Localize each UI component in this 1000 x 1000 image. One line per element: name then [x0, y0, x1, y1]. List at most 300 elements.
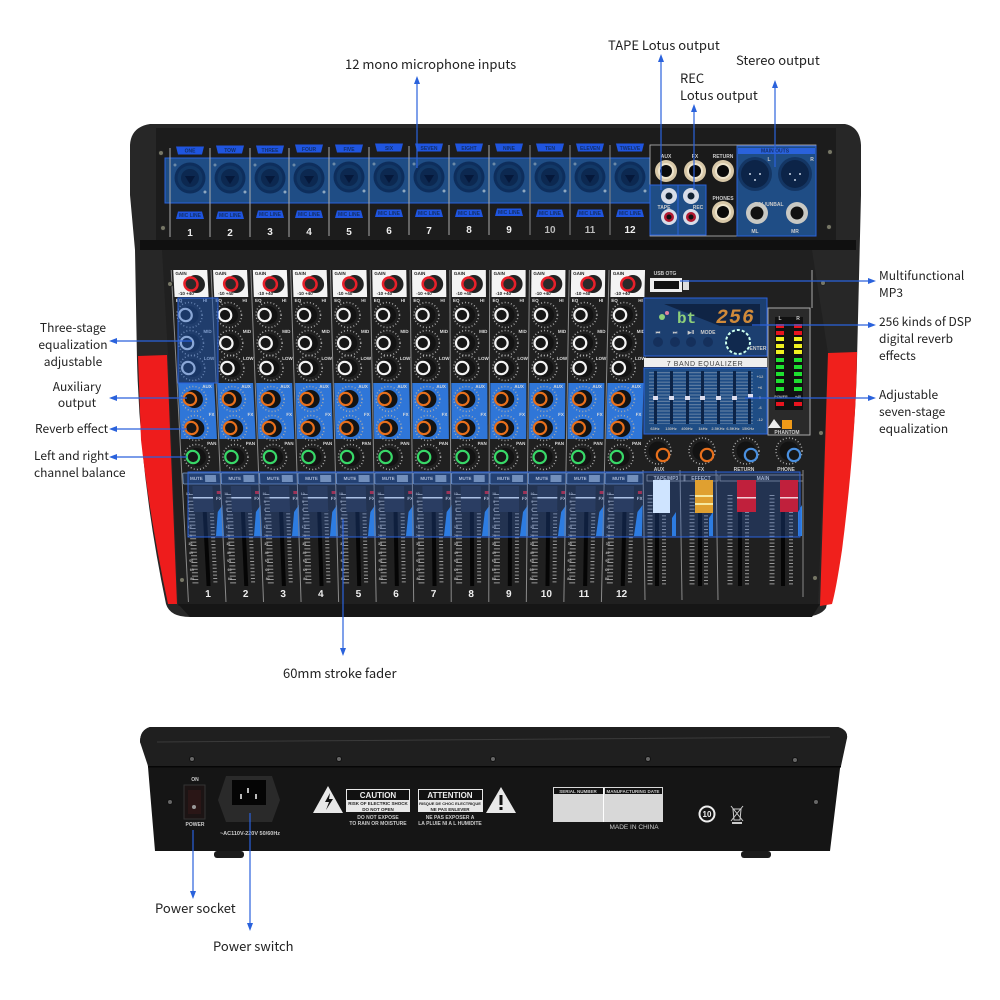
channel strip 4: 4: [318, 589, 324, 600]
rear top band: [140, 727, 847, 766]
input channel 6: [369, 144, 406, 237]
arrow: channel balance: [109, 454, 187, 460]
channel strip 6: FX: [407, 496, 413, 501]
DSP display panel: bt: [677, 310, 696, 328]
input channel 12: [610, 144, 646, 236]
power switch: POWER: [186, 822, 205, 828]
channel strip 3: [251, 270, 303, 602]
channel strip 12: 12: [616, 589, 628, 600]
label: auxiliary output: output: [58, 394, 97, 411]
channel strip 1: PAN: [207, 441, 217, 446]
channel strip 4: MID: [321, 329, 331, 334]
channel strip 12: EQ: [611, 298, 618, 303]
channel strip 3: LOW: [282, 356, 294, 361]
input channel 2: 2: [227, 228, 233, 239]
channel strip 6: 50: [378, 559, 382, 563]
channel strip 12: LOW: [635, 356, 646, 361]
channel strip 6: 0: [378, 508, 381, 512]
EQ title band: [644, 358, 767, 368]
icon: 10 year mark: [700, 806, 714, 822]
seven band equalizer: -12: [757, 417, 764, 422]
channel strip 8: 5: [455, 500, 457, 504]
input channel 6: 6: [386, 226, 392, 237]
channel strip 6: HI: [401, 298, 405, 303]
seven band equalizer: +12: [757, 374, 764, 379]
channel strip 6: -10 +40: [377, 291, 393, 296]
channel strip 2: 10: [224, 492, 228, 496]
channel strip 6: 10: [378, 525, 382, 529]
output jack panel: RETURN: [713, 154, 734, 160]
input channel 3: [250, 146, 286, 238]
channel strip 7: FX: [442, 412, 447, 417]
arrow: DSP: [752, 322, 876, 328]
channel strip 4: AUX: [319, 384, 329, 389]
channel strip 5: 5: [355, 589, 362, 600]
channel strip 5: MID: [361, 329, 370, 334]
channel strip 9: PAN: [516, 441, 525, 446]
arrow: power switch: [247, 813, 253, 931]
channel strip 1: [171, 270, 228, 602]
input highlight band: [165, 158, 650, 203]
channel strip 10: AUX: [553, 384, 563, 389]
channel strip 4: HI: [322, 298, 326, 303]
master knobs: AUX: [654, 467, 665, 473]
channel strip 2: 50: [227, 559, 231, 563]
channel strip 11: -10 +40: [575, 291, 591, 296]
bezel shadow: [140, 240, 856, 250]
channel strip 8: PAN: [478, 441, 487, 446]
output jack panel: PHONES: [712, 196, 734, 202]
channel strip 1: MID: [203, 329, 213, 334]
channel strip 4: GAIN: [295, 271, 306, 276]
channel strip 11: EQ: [572, 298, 579, 303]
level meter: PHANTOM: [774, 430, 800, 436]
power socket: ~AC110V-220V 50/60Hz: [220, 831, 280, 837]
channel strip 8: 60: [454, 568, 458, 572]
channel strip 8: 10: [454, 492, 458, 496]
channel strip 9: -10 +40: [496, 291, 511, 296]
input channel 11: 11: [585, 225, 596, 236]
channel strip 11: 80: [567, 577, 571, 581]
channel strip 8: [450, 270, 490, 602]
DSP display panel: ⏮: [656, 330, 661, 336]
master faders: [643, 470, 803, 600]
channel strip 1: 10: [186, 492, 190, 496]
channel strip 6: 30: [378, 542, 382, 546]
channel strip 1: FX: [216, 496, 222, 501]
channel strip 1: 0: [188, 508, 190, 512]
input channel 8: EIGHT: [461, 146, 477, 152]
channel strip 1: 5: [187, 500, 189, 504]
channel strip 5: HI: [361, 298, 366, 303]
channel strip 11: GAIN: [573, 271, 584, 276]
channel strip 10: 5: [531, 517, 533, 521]
channel strip 1: EQ: [176, 298, 183, 303]
channel strip 2: 60: [227, 568, 232, 572]
channel strip 4: 20: [302, 534, 306, 538]
channel strip 8: 0: [455, 508, 457, 512]
master knobs: RETURN: [734, 467, 755, 473]
input channel 10: MIC LINE: [539, 211, 562, 217]
seven band equalizer: 130Hz: [665, 426, 677, 431]
label: multifunctional MP3: MP3: [879, 284, 903, 301]
input channel 6: MIC LINE: [378, 211, 401, 217]
channel strip 10: LOW: [557, 356, 568, 361]
label: 12 mono microphone inputs: 12 mono microphone inputs: [345, 54, 516, 73]
channel strip 11: 30: [568, 542, 572, 546]
output jack panel: BAL/UNBAL: [754, 202, 784, 208]
arrow: MP3: [680, 278, 876, 284]
channel strip 7: AUX: [436, 384, 446, 389]
channel strip 6: GAIN: [374, 271, 386, 276]
output jack panel: MR: [791, 229, 799, 235]
channel strip 8: LOW: [478, 356, 489, 361]
channel strip 3: FX: [292, 496, 298, 501]
rear screws: [168, 756, 818, 804]
channel strip 1: 60: [190, 568, 194, 572]
channel strip 9: [489, 270, 529, 602]
rear body: [140, 727, 847, 851]
channel strip 6: 80: [379, 577, 383, 581]
level meter: L: [778, 316, 782, 322]
channel strip 12: 5: [607, 517, 609, 521]
input channel 12: TWELVE: [620, 146, 641, 152]
serial number plate: [553, 787, 663, 831]
channel strip 6: LOW: [400, 356, 411, 361]
channel strip 8: 10: [454, 525, 458, 529]
output jack panel: REC: [693, 205, 704, 211]
arrow: stereo output: [772, 80, 778, 167]
channel strip 12: FX: [637, 496, 643, 501]
channel strip 10: 30: [530, 542, 534, 546]
input channel 9: [489, 144, 526, 236]
channel strip 6: FX: [403, 412, 409, 417]
channel strip 10: -10 +40: [535, 291, 551, 296]
channel strip 5: 10: [339, 492, 343, 496]
input channel 11: MIC LINE: [579, 211, 602, 217]
channel strip 5: FX: [369, 496, 375, 501]
channel strip 12: HI: [638, 298, 643, 303]
channel strip 10: HI: [559, 298, 564, 303]
label: three-stage equalization: Three-stage: [40, 319, 106, 336]
channel strip 11: 40: [568, 551, 572, 555]
channel strip 9: 80: [492, 577, 496, 581]
channel strip 5: 30: [340, 542, 344, 546]
channel strip 5: 60: [341, 568, 345, 572]
channel strip 5: -10 +40: [337, 291, 353, 296]
output jack panel: ML: [751, 229, 759, 235]
channel strip 7: 0: [417, 508, 419, 512]
output jack panel: L: [767, 157, 771, 163]
input channel 3: 3: [267, 227, 273, 238]
channel strip 5: AUX: [358, 384, 368, 389]
channel strip 9: MID: [518, 329, 527, 334]
rear bevel line: [157, 737, 830, 742]
USB port: USB OTG: [654, 271, 676, 277]
channel strip 7: 20: [416, 534, 420, 538]
input channel 5: FIVE: [343, 147, 355, 153]
label: DSP reverb: digital reverb: [879, 330, 953, 347]
channel strip 11: MUTE: [574, 476, 587, 481]
channel strip 3: 60: [265, 568, 269, 572]
channel strip 4: MUTE: [305, 476, 318, 481]
channel strip 2: GAIN: [215, 271, 227, 276]
channel strip 1: GAIN: [175, 271, 187, 276]
rear seam: [148, 766, 841, 768]
seven band equalizer: +6: [758, 385, 763, 390]
channel strip 3: 10: [264, 525, 268, 529]
channel strip 6: 5: [378, 500, 380, 504]
channel strip 12: 5: [608, 500, 610, 504]
DSP display panel: MODE: [700, 330, 716, 336]
channel strip 9: 9: [506, 589, 512, 600]
attention label: [418, 789, 483, 827]
input channel 10: TEN: [545, 146, 555, 152]
channel strip 12: FX: [636, 412, 642, 417]
red left side panel: [138, 355, 177, 604]
channel strip 12: 10: [607, 492, 611, 496]
label: adjustable equalization: equalization: [879, 420, 948, 437]
arrow: microphone inputs: [414, 76, 420, 168]
arrow: rec lotus: [691, 104, 697, 190]
input channel 1: [170, 146, 206, 239]
output jack panel: FX: [692, 154, 699, 160]
label: DSP reverb: 256 kinds of DSP: [879, 313, 972, 330]
channel strip 11: HI: [599, 298, 603, 303]
channel strip 9: 40: [492, 551, 496, 555]
label: rec lotus output: REC: [680, 68, 704, 87]
label: multifunctional MP3: Multifunctional: [879, 267, 964, 284]
channel strip 7: GAIN: [414, 271, 425, 276]
input channel 3: THREE: [262, 148, 279, 154]
channel strip 8: GAIN: [454, 271, 465, 276]
input channel 12: MIC LINE: [619, 211, 642, 217]
input channel 1: 1: [187, 228, 193, 239]
channel strip 7: 10: [416, 492, 420, 496]
channel strip 3: GAIN: [255, 271, 266, 276]
channel strip 2: MID: [243, 329, 252, 334]
input channel 5: [329, 144, 366, 238]
channel strip 9: AUX: [514, 384, 524, 389]
channel strip 4: EQ: [295, 298, 302, 303]
label: three-stage equalization: equalization: [38, 336, 108, 353]
level meter: +48: [795, 395, 801, 399]
input channel 2: [210, 146, 246, 239]
label: adjustable equalization: Adjustable: [879, 386, 938, 403]
channel strip 3: 50: [265, 559, 269, 563]
channel strip 4: 50: [303, 559, 307, 563]
input channel 9: 9: [506, 225, 512, 236]
channel strip 9: GAIN: [494, 271, 505, 276]
channel strip 7: FX: [446, 496, 451, 501]
input channel 4: 4: [306, 227, 312, 238]
channel strip 5: LOW: [361, 356, 372, 361]
channel strip 10: PAN: [555, 441, 564, 446]
channel strip 2: 0: [226, 508, 228, 512]
icon: WEEE bin: [731, 806, 743, 823]
channel strip 3: 40: [265, 551, 269, 555]
channel strip 10: MUTE: [535, 476, 548, 481]
channel strip 2: 80: [228, 577, 232, 581]
input channel 6: SIX: [385, 146, 394, 152]
channel strip 5: 20: [340, 534, 344, 538]
input channel 8: 8: [466, 225, 472, 236]
DSP display panel: 256: [716, 307, 755, 330]
channel strip 12: 20: [606, 534, 610, 538]
channel strip 5: 80: [341, 577, 345, 581]
channel strip 3: HI: [282, 298, 287, 303]
channel strip 8: 30: [454, 542, 458, 546]
channel strip 4: 10: [301, 492, 305, 496]
channel strip 6: 5: [379, 517, 381, 521]
label: reverb effect: Reverb effect: [35, 420, 109, 437]
channel strip 9: 10: [492, 525, 496, 529]
EQ title band: 7 BAND EQUALIZER: [667, 361, 743, 368]
channel strip 10: 20: [530, 534, 534, 538]
channel strip 5: 5: [340, 500, 342, 504]
channel strip 10: 0: [531, 508, 533, 512]
channel strip 2: MUTE: [228, 476, 241, 481]
channel strip 12: GAIN: [613, 271, 624, 276]
channel strip 3: EQ: [255, 298, 262, 303]
channel strip 3: 0: [264, 508, 266, 512]
channel strip 8: FX: [484, 496, 490, 501]
input channel 11: ELEVEN: [580, 146, 600, 152]
master faders: EFFECT: [691, 476, 711, 482]
label: DSP reverb: effects: [879, 347, 916, 364]
feet: [214, 851, 771, 858]
channel strip 8: 5: [455, 517, 457, 521]
channel strip 9: 5: [493, 500, 495, 504]
channel strip 2: LOW: [243, 356, 254, 361]
channel strip 6: MID: [400, 329, 409, 334]
channel strip 5: [330, 270, 378, 602]
caution label: DO NOT EXPOSE: [357, 815, 399, 821]
channel strip 11: FX: [598, 496, 604, 501]
channel strip 5: 10: [340, 525, 344, 529]
channel strip 8: HI: [480, 298, 484, 303]
level meter: POWER: [774, 395, 788, 399]
channel strip 6: PAN: [400, 441, 410, 446]
label: stereo output: Stereo output: [736, 50, 820, 69]
caution label: RISK OF ELECTRIC SHOCK: [348, 801, 408, 806]
channel strip 7: 80: [416, 577, 420, 581]
USB port: [650, 270, 812, 308]
channel strip 12: 10: [606, 525, 610, 529]
channel strip 11: 0: [569, 508, 571, 512]
channel strip 12: 0: [607, 508, 610, 512]
input channel 9: NINE: [503, 146, 516, 152]
output jack panel: AUX: [661, 154, 672, 160]
red right side panel: [820, 352, 857, 606]
channel strip 7: 60: [416, 568, 420, 572]
channel strip 4: 60: [303, 568, 307, 572]
attention label: LA PLUIE NI A L HUMIDITE: [418, 821, 482, 827]
channel strip 9: FX: [519, 412, 525, 417]
channel strip 2: EQ: [215, 298, 223, 303]
channel strip 4: [291, 270, 340, 602]
channel strip 8: AUX: [475, 384, 485, 389]
channel strip 7: 30: [416, 542, 420, 546]
channel strip 3: 10: [262, 492, 266, 496]
channel strip 3: PAN: [284, 441, 294, 446]
channel strip 12: 30: [606, 542, 610, 546]
channel strip 1: 80: [190, 577, 194, 581]
input channel 4: [289, 144, 326, 238]
master knobs: FX: [698, 467, 705, 473]
channel strip 2: PAN: [246, 441, 255, 446]
input channel 2: MIC LINE: [219, 213, 242, 219]
input channel 1: ONE: [185, 148, 196, 154]
channel strip 5: FX: [364, 412, 370, 417]
input channel 7: SEVEN: [421, 146, 438, 152]
channel strip 3: 80: [266, 577, 270, 581]
channel strip 11: 10: [569, 492, 573, 496]
channel strip 6: AUX: [397, 384, 407, 389]
level meter: [768, 308, 810, 436]
channel strip 5: PAN: [362, 441, 371, 446]
DSP display panel: ENTER: [750, 346, 767, 352]
master knobs: [645, 438, 802, 473]
label: fader: 60mm stroke fader: [283, 663, 397, 682]
channel strip 6: [370, 270, 415, 602]
channel strip 10: FX: [558, 412, 564, 417]
channel strip 10: 50: [530, 559, 534, 563]
seven band equalizer: 0: [759, 395, 762, 400]
input channel 7: 7: [426, 226, 432, 237]
channel strip 2: 5: [225, 500, 228, 504]
input channel 8: [449, 144, 486, 236]
channel strip 6: 10: [377, 492, 381, 496]
channel strip 6: 40: [378, 551, 382, 555]
channel strip 7: 5: [417, 500, 419, 504]
channel strip 4: 5: [302, 517, 305, 521]
channel strip 1: AUX: [202, 384, 212, 389]
level meter: R: [796, 316, 800, 322]
chassis body: [130, 124, 861, 617]
channel strip 10: MID: [558, 329, 567, 334]
channel strip 11: 20: [568, 534, 572, 538]
channel strip 11: [564, 270, 608, 602]
channel strip 9: 60: [492, 568, 496, 572]
channel strip 4: 80: [303, 577, 307, 581]
DSP display panel: ⏭: [673, 330, 678, 336]
channel strip 12: AUX: [631, 384, 641, 389]
channel strip 5: 5: [341, 517, 343, 521]
channel strip 4: 40: [302, 551, 307, 555]
channel strip 2: 20: [226, 534, 230, 538]
channel strip 10: 40: [530, 551, 534, 555]
input channel 10: [530, 144, 566, 236]
arrow: reverb: [109, 426, 187, 432]
channel strip 1: FX: [209, 412, 215, 417]
channel strip 2: 40: [227, 551, 231, 555]
input channel 8: MIC LINE: [458, 211, 481, 217]
input channel 4: MIC LINE: [298, 212, 321, 218]
caution label: CAUTION: [360, 791, 396, 800]
channel strip 1: 5: [188, 517, 190, 521]
channel strip 1: MUTE: [190, 476, 203, 481]
channel strip 12: PAN: [632, 441, 641, 446]
channel strip 5: 0: [340, 508, 342, 512]
seven band equalizer: 1kHz: [698, 426, 708, 431]
arrow: auxiliary: [109, 395, 187, 401]
channel strip 4: PAN: [323, 441, 332, 446]
channel strip 1: 30: [188, 542, 193, 546]
output jack panel: R: [810, 157, 814, 163]
channel strip 9: 20: [492, 534, 496, 538]
channel strip 4: 5: [302, 500, 304, 504]
